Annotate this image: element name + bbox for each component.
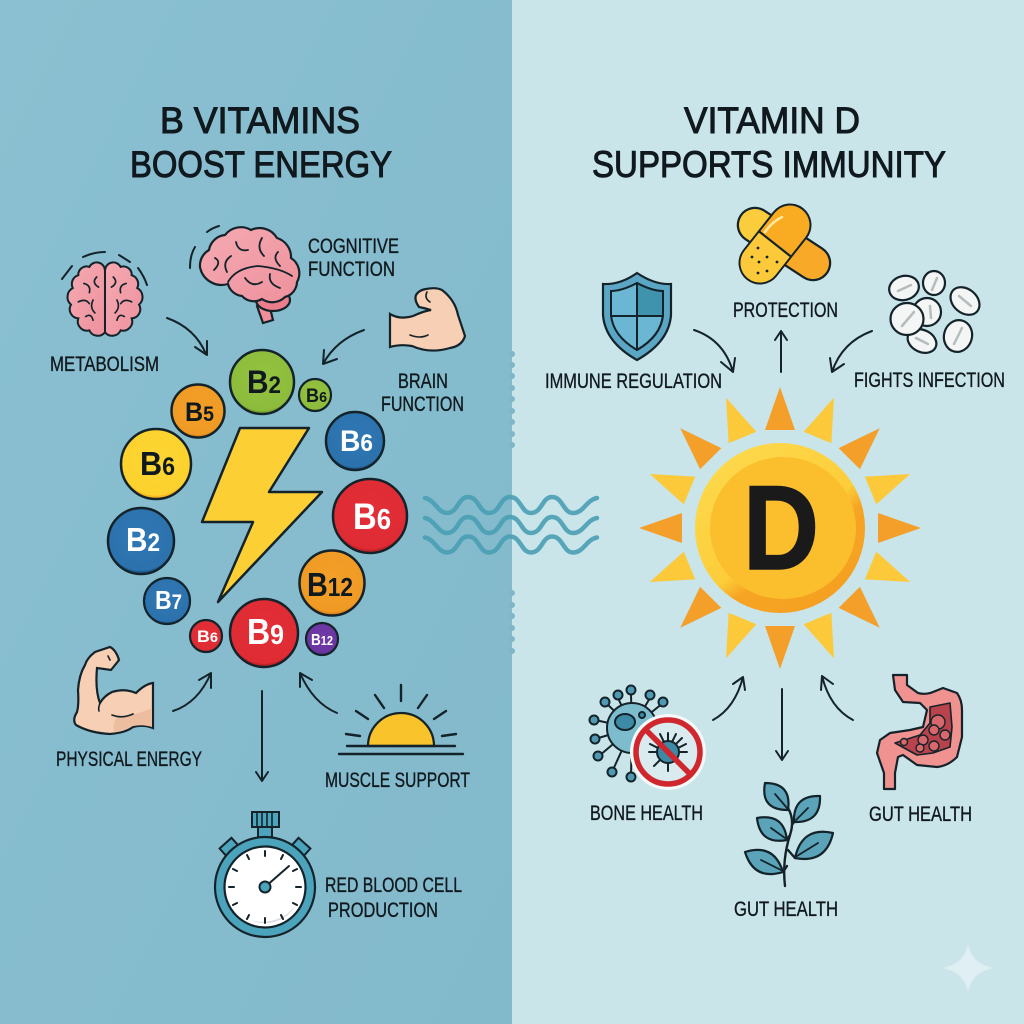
icon: sun with vitamin D: D	[743, 461, 819, 595]
label: physical energy: PHYSICAL ENERGY	[56, 748, 202, 771]
vitamin B9 red large: B9	[247, 611, 284, 652]
arrow: up to protection	[775, 331, 787, 372]
vitamin B12 orange	[300, 550, 364, 616]
vitamin B6 red small: B6	[197, 627, 218, 646]
label: red blood cell production: RED BLOOD CELL	[325, 874, 462, 897]
icon: intestine	[877, 675, 962, 789]
label: brain function: FUNCTION	[381, 393, 464, 416]
label: brain function: BRAIN	[398, 370, 448, 393]
vitamin B5 orange: B5	[185, 397, 214, 427]
arrow: down to stopwatch	[256, 691, 268, 781]
icon: flexed arm, physical energy	[74, 647, 153, 734]
label: gut health, plant: GUT HEALTH	[734, 898, 838, 921]
vitamin B12 purple	[306, 623, 338, 655]
vitamin B2 blue	[108, 508, 174, 574]
vitamin B2 green large: B2	[247, 364, 281, 400]
vitamin B9 red large	[230, 599, 298, 667]
label: metabolism: METABOLISM	[50, 353, 159, 376]
vitamin B2 green large	[230, 350, 294, 414]
label: muscle support: MUSCLE SUPPORT	[325, 769, 470, 792]
vitamin B6 green small: B6	[306, 386, 327, 407]
arrow: immune regulation to sun	[694, 330, 735, 372]
icon: brain side view	[190, 226, 299, 323]
connecting waves	[425, 497, 597, 552]
label: gut health, intestine: GUT HEALTH	[869, 803, 972, 826]
label: cognitive function: COGNITIVE	[308, 235, 399, 258]
title: vitamin D supports immunity: VITAMIN D	[684, 100, 860, 141]
icon: lightning bolt	[202, 428, 322, 602]
vitamin B6 red	[333, 479, 407, 553]
title: vitamin D supports immunity: SUPPORTS IMMUNITY	[592, 144, 946, 185]
arrow: down to plant	[776, 689, 788, 760]
vitamin B6 blue: B6	[340, 425, 373, 458]
vitamin B6 yellow	[121, 429, 191, 499]
arrow: brain function to vitamins	[323, 330, 364, 364]
icon: stopwatch	[215, 812, 315, 937]
icon: rising sun	[339, 685, 463, 754]
arrow: muscle support to vitamins	[300, 673, 337, 713]
title: vitamin D supports immunity	[592, 100, 946, 185]
label: brain function	[381, 370, 464, 416]
vitamin B2 blue: B2	[126, 521, 160, 558]
title: B vitamins boost energy	[130, 100, 392, 185]
label: cognitive function	[308, 235, 399, 281]
vitamin B6 blue	[326, 412, 384, 470]
icon: capsule pills	[741, 217, 813, 282]
arrow: bone health to sun	[713, 677, 745, 720]
arrow: metabolism to vitamins	[167, 318, 207, 355]
label: bone health: BONE HEALTH	[590, 802, 703, 825]
icon: flexed arm, brain function	[390, 288, 465, 351]
divider bumps	[509, 351, 515, 654]
vitamin circles cluster	[108, 350, 407, 667]
panel: vitamin D supports immunity	[512, 0, 1024, 1024]
label: cognitive function: FUNCTION	[308, 258, 395, 281]
vitamin B6 red small	[190, 620, 222, 652]
icon: shield	[603, 273, 671, 360]
vitamin B7 blue	[144, 578, 190, 624]
vitamin B6 green small	[299, 379, 331, 411]
vitamin B6 yellow: B6	[140, 445, 175, 482]
label: immune regulation: IMMUNE REGULATION	[545, 370, 722, 393]
vitamin B5 orange	[172, 384, 224, 438]
label: red blood cell production: PRODUCTION	[328, 899, 438, 922]
title: B vitamins boost energy: BOOST ENERGY	[130, 144, 392, 185]
label: protection: PROTECTION	[733, 299, 838, 322]
arrow: physical energy to vitamins	[173, 673, 211, 711]
vitamin B12 orange: B12	[307, 566, 353, 603]
panel: B vitamins boost energy	[0, 0, 512, 1024]
icon: sun with vitamin D	[639, 387, 921, 669]
arrow: gut health to sun	[821, 676, 853, 720]
icon: sparkle	[943, 944, 993, 992]
icon: leafy plant	[745, 783, 833, 886]
icon: brain top view	[62, 252, 147, 336]
vitamin B12 purple: B12	[311, 632, 333, 649]
vitamin B6 red: B6	[353, 496, 391, 537]
title: B vitamins boost energy: B VITAMINS	[160, 100, 360, 141]
arrow: fights infection to sun	[830, 331, 872, 372]
label: red blood cell production	[325, 874, 462, 922]
icon: virus with prohibition sign	[590, 686, 706, 790]
vitamin B7 blue: B7	[155, 585, 182, 615]
icon: white pills	[886, 271, 985, 357]
